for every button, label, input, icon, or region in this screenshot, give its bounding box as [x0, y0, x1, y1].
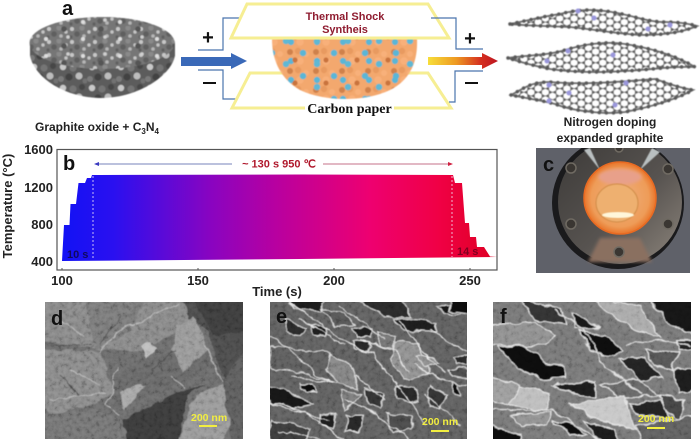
panel label c: c	[543, 154, 554, 176]
left electrode wires	[198, 18, 247, 99]
y axis ticks: 1600	[24, 142, 53, 157]
flange bolts	[566, 144, 673, 257]
right electrode wires	[431, 18, 483, 102]
label: graphite oxide + C3N4: N	[146, 120, 154, 134]
panel label d: d	[51, 308, 63, 330]
label 10 s: 10 s	[67, 249, 88, 261]
nitrogen doped graphene sheets	[508, 8, 697, 113]
panel f: SEM image	[488, 298, 696, 440]
label: graphite oxide + C3N4: 4	[154, 127, 159, 136]
x axis title: Time (s)	[252, 284, 302, 299]
y axis ticks: 800	[31, 217, 53, 232]
chart frame	[57, 150, 497, 270]
panel e: SEM image	[270, 298, 472, 440]
heated disc between plates	[272, 39, 417, 99]
upper plate	[231, 4, 449, 38]
x axis ticks: 200	[323, 273, 345, 288]
label: Thermal Shock Synthesis: Thermal Shock	[306, 11, 385, 23]
panel a: thermal shock schematic: Syntheis	[322, 24, 368, 36]
y axis title: Temperature (°C)	[0, 154, 15, 258]
panel a: thermal shock schematic	[30, 0, 697, 145]
glowing window	[584, 162, 656, 234]
lower carbon paper plate	[232, 73, 451, 108]
scale bar f: 200 nm	[638, 413, 674, 425]
label: Carbon paper: Carbon paper	[307, 102, 392, 117]
y axis ticks: 1200	[24, 180, 53, 195]
blue process arrow	[181, 53, 247, 69]
scale bar f	[638, 415, 674, 429]
scale bar e	[422, 418, 458, 432]
label: nitrogen doping expanded graphite: Nitrogen doping	[564, 115, 656, 129]
y axis ticks	[24, 142, 53, 269]
panel label f: f	[500, 306, 507, 328]
x axis ticks: 150	[187, 273, 209, 288]
plus sign right: +	[464, 28, 476, 50]
duration arrows	[96, 163, 451, 165]
scale bar d: 200 nm	[191, 412, 227, 424]
panel label e: e	[276, 306, 287, 328]
panel b: temperature chart	[0, 142, 497, 299]
label: graphite oxide + C3N4: 3	[141, 127, 146, 136]
y axis ticks: 400	[31, 254, 53, 269]
panel c: photo of reactor	[536, 137, 690, 273]
reactor flange	[552, 137, 684, 269]
temperature profile area	[62, 174, 497, 261]
annotation: 130 s 950 C: ~ 130 s 950 ℃	[242, 158, 316, 170]
hot sample	[602, 212, 634, 218]
panel d: SEM image	[40, 298, 248, 440]
minus sign right	[465, 82, 478, 84]
scale bar d	[191, 414, 227, 427]
panel label b: b	[63, 153, 75, 175]
label 14 s: 14 s	[457, 246, 478, 258]
label: graphite oxide + C3N4: Graphite oxide + C	[35, 120, 141, 134]
dashed markers	[93, 176, 452, 260]
panel a: thermal shock schematic: expanded graphite	[557, 131, 664, 145]
x axis ticks: 250	[459, 273, 481, 288]
graphite oxide and C3N4 disc	[30, 17, 175, 98]
plus sign left: +	[202, 27, 214, 49]
x axis ticks	[51, 273, 481, 288]
minus sign left	[203, 82, 216, 84]
gradient arrow	[428, 53, 498, 69]
scale bar e: 200 nm	[422, 416, 458, 428]
x axis ticks: 100	[51, 273, 73, 288]
